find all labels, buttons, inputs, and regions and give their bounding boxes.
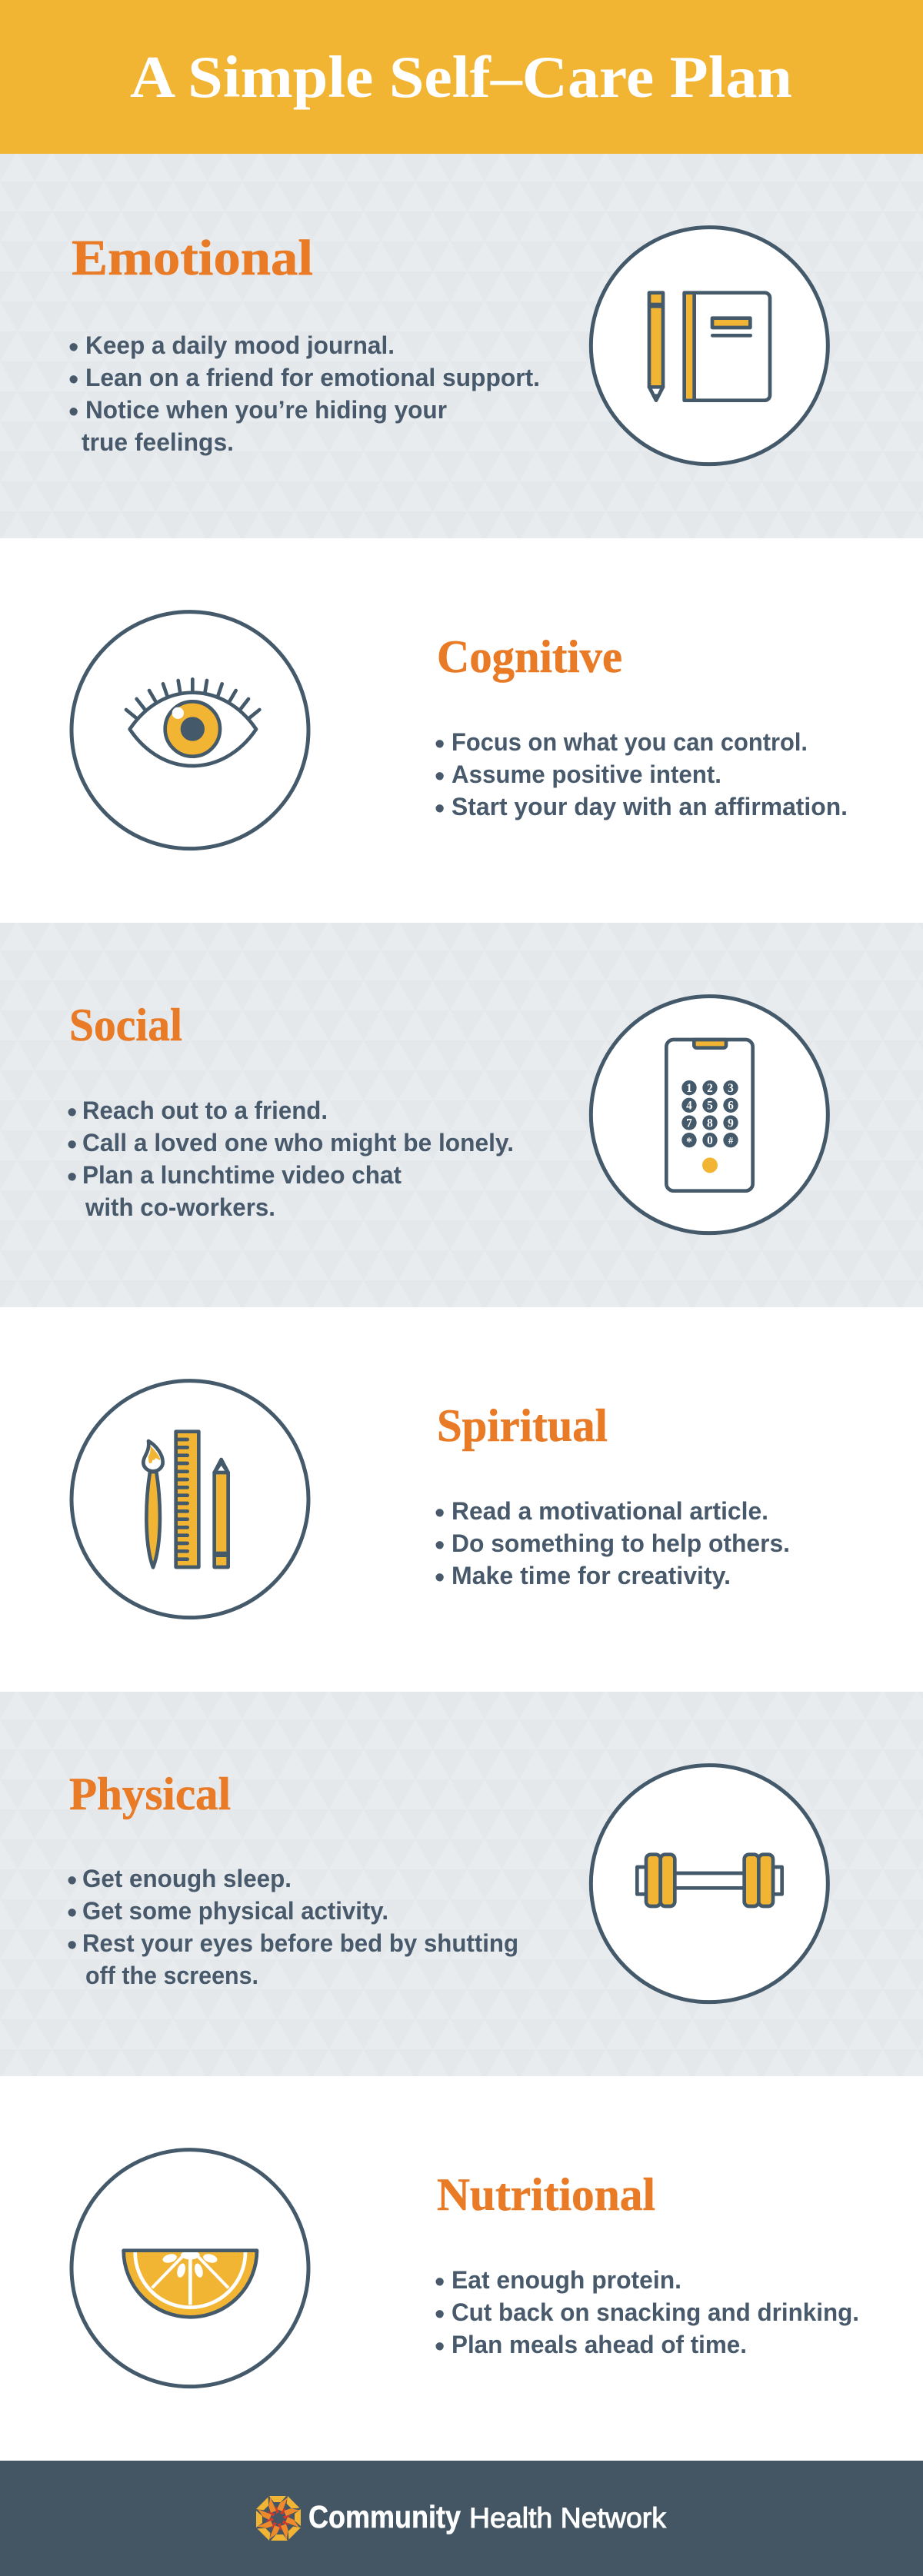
icon: brush, ruler and pencil [72, 1381, 308, 1618]
social bullet list: Call a loved one who might be lonely. [82, 1129, 514, 1157]
panel: physical [0, 1692, 923, 2076]
heading: physical: Physical [69, 1769, 231, 1819]
icon: pencil and notebook [591, 228, 828, 464]
panel: spiritual [0, 1307, 923, 1692]
spiritual bullet list [435, 1497, 790, 1594]
physical bullet list: • [67, 1865, 77, 1897]
social bullet list: • [67, 1097, 77, 1129]
emotional bullet list: • [68, 396, 78, 428]
emotional bullet list [68, 331, 540, 456]
physical bullet list: • [67, 1897, 77, 1929]
keypad: 3 [728, 1082, 734, 1095]
heading: emotional: Emotional [72, 230, 313, 286]
brand name: Community [308, 2499, 461, 2534]
icon: phone keypad [591, 997, 828, 1233]
icon: eye [72, 612, 308, 849]
nutritional bullet list [435, 2266, 859, 2363]
title: A Simple Self–Care Plan [130, 44, 792, 110]
icon: citrus slice [72, 2150, 308, 2387]
emotional bullet list: Lean on a friend for emotional support. [85, 364, 540, 391]
cognitive bullet list [435, 728, 848, 825]
spiritual bullet list: • [435, 1529, 445, 1562]
panel: nutritional [0, 2076, 923, 2461]
cognitive bullet list: Start your day with an affirmation. [452, 793, 848, 820]
brand name [308, 2499, 666, 2534]
keypad: 5 [707, 1100, 713, 1113]
nutritional bullet list: • [435, 2298, 445, 2331]
nutritional bullet list: Plan meals ahead of time. [452, 2331, 747, 2358]
nutritional bullet list: • [435, 2331, 445, 2363]
spiritual bullet list: • [435, 1562, 445, 1594]
social bullet list: Plan a lunchtime video chat [82, 1161, 402, 1189]
panel: social [0, 923, 923, 1307]
emotional bullet list: true feelings. [82, 428, 234, 456]
spiritual bullet list: Read a motivational article. [452, 1497, 768, 1525]
keypad: 8 [707, 1117, 713, 1130]
emotional bullet list: • [68, 331, 78, 364]
cognitive bullet list: Assume positive intent. [452, 760, 721, 788]
header banner [0, 0, 923, 154]
keypad: 0 [707, 1134, 713, 1147]
cognitive bullet list: Focus on what you can control. [452, 728, 808, 756]
social bullet list: with co-workers. [85, 1193, 275, 1221]
pencil [215, 1459, 228, 1567]
nutritional bullet list: • [435, 2266, 445, 2298]
heading: spiritual: Spiritual [437, 1400, 608, 1451]
physical bullet list: • [67, 1929, 77, 1962]
panel: cognitive [0, 538, 923, 923]
keypad [681, 1080, 738, 1149]
spiritual bullet list: Make time for creativity. [452, 1562, 731, 1589]
emotional bullet list: Notice when you’re hiding your [85, 396, 447, 424]
nutritional bullet list: Cut back on snacking and drinking. [452, 2298, 859, 2326]
spiritual bullet list: Do something to help others. [452, 1529, 790, 1557]
keypad: 6 [728, 1100, 734, 1113]
keypad: 7 [686, 1117, 692, 1130]
heading: nutritional: Nutritional [437, 2169, 655, 2220]
ruler [176, 1432, 198, 1567]
emotional bullet list: Keep a daily mood journal. [85, 331, 395, 359]
physical bullet list: Get some physical activity. [82, 1897, 388, 1925]
logo mark [256, 2496, 301, 2541]
emotional bullet list: • [68, 364, 78, 396]
notebook [685, 293, 770, 401]
physical bullet list: off the screens. [85, 1962, 258, 1989]
physical bullet list: Get enough sleep. [82, 1865, 292, 1892]
keypad: 9 [728, 1117, 734, 1130]
heading: social: Social [69, 1000, 182, 1050]
spiritual bullet list: • [435, 1497, 445, 1529]
cognitive bullet list: • [435, 728, 445, 760]
panel: emotional [0, 154, 923, 538]
keypad: 1 [686, 1082, 692, 1095]
keypad: 2 [707, 1082, 713, 1095]
keypad: 4 [686, 1100, 692, 1113]
social bullet list: • [67, 1161, 77, 1193]
social bullet list: Reach out to a friend. [82, 1097, 328, 1124]
heading: cognitive: Cognitive [437, 631, 622, 682]
pencil [649, 293, 663, 401]
cognitive bullet list: • [435, 760, 445, 793]
keypad: * [686, 1136, 692, 1149]
footer [0, 2461, 923, 2576]
social bullet list [67, 1097, 514, 1221]
cognitive bullet list: • [435, 793, 445, 825]
social bullet list: • [67, 1129, 77, 1161]
paint brush [143, 1441, 163, 1567]
physical bullet list [67, 1865, 518, 1989]
icon: dumbbell [591, 1766, 828, 2002]
keypad: # [728, 1135, 734, 1146]
brand name: Health Network [469, 2502, 666, 2534]
physical bullet list: Rest your eyes before bed by shutting [82, 1929, 518, 1957]
nutritional bullet list: Eat enough protein. [452, 2266, 681, 2294]
